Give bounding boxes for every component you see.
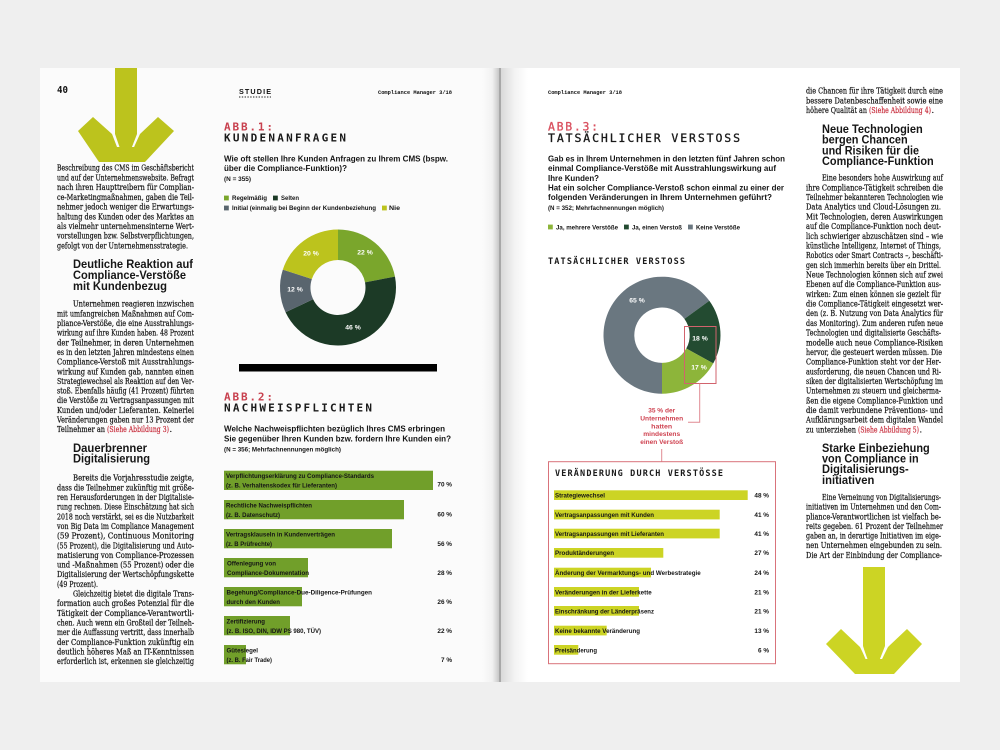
icon: bottom arrow xyxy=(826,567,922,674)
bar chart: (z. B. Datenschutz) xyxy=(226,512,280,519)
text block: Neue Technologien paragraph: ihre Compliance-Tätigkeit schreiben die xyxy=(806,182,943,192)
figure title: ABB.3: xyxy=(548,120,598,134)
text block: Digitalisierung paragraphs: der Compliance-Funktion zukünftig ein xyxy=(57,637,195,647)
text block: Neue Technologien paragraph: Eine besonders hohe Auswirkung auf xyxy=(822,173,944,183)
bar chart: (z. B Prüfrechte) xyxy=(226,541,272,548)
text block: Digitalisierung paragraphs: und -Maßnahmen (55 Prozent) oder die xyxy=(57,560,194,570)
figure title: NACHWEISPFLICHTEN xyxy=(224,402,372,415)
legend: Ja, mehrere Verstöße xyxy=(556,224,618,231)
text block: Neue Technologien paragraph: wirken: Zum einen können sie gezielt für xyxy=(806,289,941,299)
callout text: Unternehmen xyxy=(640,415,683,422)
callout: 35 % highlight box and leader xyxy=(662,326,716,462)
callout text: 35 % der xyxy=(648,407,676,414)
text block: Digitalisierung paragraphs: erforderlich ist, erkennen sie gleichzeitig xyxy=(57,656,195,666)
text block: Reaktion paragraph: stoß. Ebenfalls häufig (41 Prozent) führten xyxy=(57,386,194,396)
text block: Reaktion paragraph: pliance-Verstöße, die eine Ausstrahlungs- xyxy=(57,318,194,328)
bar chart xyxy=(224,471,452,664)
bar chart: Keine bekannte Veränderung xyxy=(555,628,640,635)
text block: Neue Technologien paragraph: (Siehe Abbildung 5) xyxy=(858,424,919,434)
figure title xyxy=(224,391,372,415)
divider bar xyxy=(239,364,437,372)
text block: left column intro: vorstellungen bzw. Selbstverpflichtungen, xyxy=(56,231,194,241)
text block: Starke Einbeziehung paragraph: initiativen im Unternehmen und den Com- xyxy=(806,502,941,512)
text block: left column intro: Beschreibung des CMS im Geschäftsbericht xyxy=(57,163,194,173)
text block: Neue Technologien paragraph: Neue Technologien können sich auf zwei xyxy=(806,270,943,280)
figure title xyxy=(224,121,346,144)
text block: Digitalisierung paragraphs: Digitalisierung der Wertschöpfungskette xyxy=(57,569,194,579)
question: Ihre Kunden? xyxy=(548,173,599,183)
question: Sie gegenüber Ihren Kunden bzw. fordern Ihre Kunden ein? xyxy=(224,434,451,444)
text block: right column intro: (Siehe Abbildung 4) xyxy=(869,105,931,115)
text block: Digitalisierung paragraphs: 2018 noch verstärkt, sei es die Nutzbarkeit xyxy=(57,511,194,521)
running head right: Compliance Manager 3/18 xyxy=(548,90,622,96)
text block: Digitalisierung paragraphs: rung rechnen. Diese Einschätzung hat sich xyxy=(57,502,194,512)
heading: Starke Einbeziehung: Starke Einbeziehung xyxy=(822,441,930,455)
text block: Digitalisierung paragraphs: (59 Prozent), Continuous Monitoring xyxy=(57,531,195,541)
bar chart: Strategiewechsel xyxy=(555,492,605,499)
text block: Reaktion paragraph: Veränderungen gaben nur 13 Prozent der xyxy=(56,414,194,424)
text block: right column intro: bessere Datenbeschaffenheit sowie eine xyxy=(806,95,943,105)
bar chart: Compliance-Dokumentation xyxy=(227,570,309,577)
page number: 40 xyxy=(57,85,68,96)
question: Hat ein solcher Compliance-Verstoß schon einmal zu einer der xyxy=(548,183,785,193)
text block: Neue Technologien paragraph: ßen die eigene Compliance-Funktion und xyxy=(806,395,944,405)
text block: Starke Einbeziehung paragraph xyxy=(806,492,943,560)
question: Wie oft stellen Ihre Kunden Anfragen zu Ihrem CMS (bspw. xyxy=(224,154,448,164)
text block: Neue Technologien paragraph: Data Analytics und Cloud-Lösungen zu. xyxy=(806,202,941,212)
text block: Neue Technologien paragraph: hervor, die gesteuert werden müssen. Die xyxy=(806,347,942,357)
question xyxy=(548,154,785,212)
text block: right column intro: . xyxy=(932,105,934,115)
bar chart: Rechtliche Nachweispflichten xyxy=(226,502,312,510)
text block: left column intro: ce-Marketingmaßnahmen, gaben die Teil- xyxy=(57,192,194,202)
bar chart: Produktänderungen xyxy=(555,550,614,557)
chart title: TATSÄCHLICHER VERSTOSS xyxy=(548,256,685,267)
text block: Digitalisierung paragraphs: (49 Prozent). xyxy=(57,579,98,589)
bar chart: Verpflichtungserklärung zu Compliance-Standards xyxy=(226,473,374,480)
bar chart: 7 % xyxy=(441,657,452,664)
text block: Neue Technologien paragraph: ausforderung, die neuen Chancen und Ri- xyxy=(806,366,941,376)
donut chart: 20 % xyxy=(303,250,319,258)
bar chart: 28 % xyxy=(437,570,452,577)
question: über die Compliance-Funktion)? xyxy=(224,163,347,173)
legend: Keine Verstöße xyxy=(696,224,740,231)
text block: Digitalisierung paragraphs: mer die Auffassung vertritt, dass innerhalb xyxy=(57,627,194,637)
text block: Starke Einbeziehung paragraph: Die Art der Einbindung der Compliance- xyxy=(806,550,942,560)
heading: Neue Technologien: bergen Chancen xyxy=(822,133,908,147)
text block: Neue Technologien paragraph: Robotics oder Smart Contracts –, beschäfti- xyxy=(806,250,943,260)
text block: Neue Technologien paragraph: den (z. B. Nutzung von Data Analytics für xyxy=(806,308,943,318)
text block: Neue Technologien paragraph: gen sich immerhin bereits über ein Drittel. xyxy=(806,260,941,270)
question: Gab es in Ihrem Unternehmen in den letzten fünf Jahren schon xyxy=(548,154,785,164)
text block: Digitalisierung paragraphs: chen. Auch wenn ein Großteil der Teilneh- xyxy=(57,618,194,628)
question: (N = 355) xyxy=(224,176,251,183)
question: Welche Nachweispflichten bezüglich Ihres CMS erbringen xyxy=(224,424,445,434)
callout text: hatten xyxy=(651,424,672,430)
text block: left column intro: und auf der Unternehmenswebsite. Befragt xyxy=(57,172,194,182)
text block: Reaktion paragraph: Strategiewechsel als Reaktion auf den Ver- xyxy=(57,376,194,386)
donut chart: 46 % xyxy=(345,324,361,332)
section tag: STUDIE: STUDIE xyxy=(239,87,271,96)
bar chart: Offenlegung von xyxy=(227,560,276,568)
text block: Reaktion paragraph: Unternehmen reagieren inzwischen xyxy=(73,299,195,309)
text block: Digitalisierung paragraphs: Bereits die Vorjahresstudie zeigte, xyxy=(73,473,194,483)
bar chart: 22 % xyxy=(437,628,452,635)
text block: left column intro: nach ihren Haupttreibern für Complian- xyxy=(57,182,194,192)
figure title xyxy=(548,120,740,145)
bar chart: Begehung/Compliance-Due-Diligence-Prüfungen xyxy=(226,590,372,596)
question: (N = 356; Mehrfachnennungen möglich) xyxy=(224,447,341,454)
text block: Reaktion paragraph: Kunden und/oder Lieferanten. Keinerlei xyxy=(57,405,194,415)
question: einmal Compliance-Verstöße mit Ausstrahlungswirkung auf xyxy=(548,163,776,173)
bar chart: 13 % xyxy=(754,628,769,635)
text block: Neue Technologien paragraph: künstliche Intelligenz, Internet of Things, xyxy=(806,240,941,250)
text block: Neue Technologien paragraph: Compliance-Funktion steht vor der Her- xyxy=(806,357,941,367)
bar chart: Vertragsanpassungen mit Kunden xyxy=(555,512,654,519)
heading: Deutliche Reaktion: mit Kundenbezug xyxy=(73,279,167,293)
text block: Starke Einbeziehung paragraph: nen Unternehmen eingebunden zu sein. xyxy=(806,540,942,550)
text block: left column intro: haltung des Kunden oder des Marktes an xyxy=(57,211,195,221)
donut chart xyxy=(604,277,720,394)
legend: Selten xyxy=(281,195,299,202)
text block: Reaktion paragraph: die Verstöße zu Vertragsanpassungen mit xyxy=(57,395,195,405)
donut chart: 12 % xyxy=(287,286,303,294)
text block: Neue Technologien paragraph: die damit verbundene Präventions- und xyxy=(806,405,944,415)
bar chart: 6 % xyxy=(758,647,769,654)
bar chart: 41 % xyxy=(754,512,769,519)
text block: Reaktion paragraph: Compliance-Verstoß mit Ausstrahlungs- xyxy=(57,357,194,367)
bar chart: 27 % xyxy=(754,550,769,557)
question xyxy=(224,424,451,454)
question: (N = 352; Mehrfachnennungen möglich) xyxy=(548,205,664,212)
bar chart: Gütesiegel xyxy=(226,648,258,654)
bar chart: (z. B. ISO, DIN, IDW PS 980, TÜV) xyxy=(226,626,321,635)
bar chart: 21 % xyxy=(754,608,769,615)
text block: Neue Technologien paragraph: auf die Compliance-Funktion noch deut- xyxy=(806,221,941,231)
text block: Starke Einbeziehung paragraph: reits gegeben. 61 Prozent der Teilnehmer xyxy=(806,521,943,531)
heading: Dauerbrenner xyxy=(73,441,150,466)
text block: Digitalisierung paragraphs: deutlich höheres Maß an IT-Kenntnissen xyxy=(57,646,195,656)
heading: Deutliche Reaktion: Compliance-Verstöße xyxy=(73,268,186,282)
bar chart: Zertifizierung xyxy=(226,618,265,626)
legend: Initial (einmalig bei Beginn der Kundenbeziehung xyxy=(232,205,376,212)
panel: Abb. 3 xyxy=(548,120,785,664)
figure title: ABB.2: xyxy=(224,391,273,404)
bar chart: 41 % xyxy=(754,531,769,538)
text block: Digitalisierung paragraphs: dass die Teilnehmer zukünftig mit größe- xyxy=(57,482,194,492)
text block: Neue Technologien paragraph: . xyxy=(920,424,922,434)
text block: left column intro xyxy=(56,163,195,250)
text block: Digitalisierung paragraphs: Gleichzeitig bietet die digitale Trans- xyxy=(73,588,194,598)
text block: Neue Technologien paragraph: lich schwieriger abzuschätzen sind – wie xyxy=(806,231,943,241)
bar chart: 60 % xyxy=(437,512,452,519)
legend: Ja, einen Verstoß xyxy=(632,224,682,231)
text block: left column intro: gefolgt von der Unternehmensstrategie. xyxy=(57,240,188,250)
text block: Neue Technologien paragraph: siken der digitalisierten Wertschöpfung im xyxy=(806,376,943,386)
bar chart: 24 % xyxy=(754,570,769,577)
text block: Digitalisierung paragraphs xyxy=(56,473,195,666)
text block: Reaktion paragraph: (Siehe Abbildung 3) xyxy=(107,424,169,434)
running head left: Compliance Manager 3/18 xyxy=(378,90,452,96)
text block: Starke Einbeziehung paragraph: Eine Verneinung von Digitalisierungs- xyxy=(822,492,941,502)
text block: Starke Einbeziehung paragraph: pliance-Verantwortlichen ist vielfach be- xyxy=(806,511,941,521)
text block: Neue Technologien paragraph: Teilnehmer bekannteren Technologien wie xyxy=(806,192,943,202)
text block: Neue Technologien paragraph: zu unterziehen xyxy=(806,424,857,434)
text block: Neue Technologien paragraph: Aufklärungsarbeit dem digitalen Wandel xyxy=(805,415,943,425)
legend xyxy=(548,224,740,231)
text block: Reaktion paragraph: . xyxy=(170,424,172,434)
bar chart: Preisänderung xyxy=(555,647,597,654)
right page xyxy=(499,68,960,682)
question xyxy=(224,154,448,183)
text block: Reaktion paragraph: wirkung auf Kunden gab, nannten einen xyxy=(57,366,195,376)
text block: Digitalisierung paragraphs: matisierung von Compliance-Prozessen xyxy=(57,550,195,560)
text block: Neue Technologien paragraph xyxy=(805,173,944,434)
bar chart: 70 % xyxy=(437,482,452,489)
heading: Neue Technologien: und Risiken für die xyxy=(822,143,919,157)
donut chart: 17 % xyxy=(691,364,707,371)
bar chart: Änderung der Vermarktungs- und Werbestrategie xyxy=(555,569,701,577)
text block: Digitalisierung paragraphs: formation auch großes Potenzial für die xyxy=(57,598,194,608)
bar chart: 21 % xyxy=(754,589,769,596)
callout text: mindestens xyxy=(643,431,680,438)
text block: Neue Technologien paragraph: Ebenen auf die Compliance-Funktion aus- xyxy=(806,279,941,289)
text block: Neue Technologien paragraph: Unternehmen zu steuern und gleicherma- xyxy=(806,386,941,396)
text block: left column intro: als vielmehr unternehmensinterne Wert- xyxy=(57,221,194,231)
question: folgenden Veränderungen in Ihrem Unternehmen geführt? xyxy=(548,192,772,202)
donut chart xyxy=(280,230,396,346)
bar chart: (z. B. Fair Trade) xyxy=(226,657,272,664)
heading: Neue Technologien xyxy=(822,122,934,168)
text block: Reaktion paragraph: es in den letzten Jahren mindestens einen xyxy=(57,347,194,357)
figure title: KUNDENANFRAGEN xyxy=(224,132,346,144)
figure title: TATSÄCHLICHER VERSTOSS xyxy=(548,130,740,145)
legend: Nie xyxy=(389,205,400,212)
text block: Neue Technologien paragraph: Technologien und digitalisierte Geschäfts- xyxy=(806,328,941,338)
text block: right column intro: höhere Qualität an xyxy=(806,105,867,115)
heading: Starke Einbeziehung: Digitalisierungs- xyxy=(822,462,909,476)
text block: Neue Technologien paragraph: das Monitoring). Zum anderen rufen neue xyxy=(806,318,943,328)
bar chart: Einschränkung der Länderpräsenz xyxy=(555,608,654,615)
bar chart: 48 % xyxy=(754,492,769,499)
text block: Reaktion paragraph xyxy=(56,299,195,434)
heading: Deutliche Reaktion: Deutliche Reaktion auf xyxy=(73,257,193,271)
heading: Dauerbrenner: Dauerbrenner xyxy=(73,441,147,455)
text block: Reaktion paragraph: wirkung auf ihre Kunden haben. 48 Prozent xyxy=(57,328,194,338)
panel: Abb. 2 xyxy=(224,391,452,664)
text block: Digitalisierung paragraphs: (55 Prozent), die Digitalisierung und Auto- xyxy=(57,540,194,550)
donut chart: 18 % xyxy=(692,335,708,342)
text block: right column intro xyxy=(806,86,943,115)
text block: Reaktion paragraph: der Teilnehmer, in deren Unternehmen xyxy=(57,337,195,347)
bar chart: Vertragsklauseln in Kundenverträgen xyxy=(226,532,335,538)
callout text xyxy=(640,407,683,446)
text block: Digitalisierung paragraphs: von Big Data im Compliance Management xyxy=(56,521,195,531)
bar chart: 26 % xyxy=(437,599,452,606)
panel: Veränderung durch Verstöße xyxy=(548,462,776,664)
bar chart xyxy=(554,490,769,655)
text block: Digitalisierung paragraphs: Tätigkeit der Compliance-Verantwortli- xyxy=(57,608,194,618)
text block: Reaktion paragraph: mit umfangreichen Maßnahmen auf Com- xyxy=(57,308,194,318)
heading: Starke Einbeziehung xyxy=(822,441,930,487)
text block: Neue Technologien paragraph: die Compliance-Tätigkeit eingesetzt wer- xyxy=(806,298,943,308)
heading: Deutliche Reaktion xyxy=(73,257,193,293)
bar chart: Veränderungen in der Lieferkette xyxy=(555,589,652,596)
text block: Neue Technologien paragraph: Mit Technologien, deren Auswirkungen xyxy=(806,211,944,221)
legend: Regelmäßig xyxy=(232,195,267,202)
left page xyxy=(40,68,499,682)
donut chart: 22 % xyxy=(357,250,373,256)
heading: Starke Einbeziehung: von Compliance in xyxy=(822,452,919,466)
figure title: ABB.1: xyxy=(224,121,273,134)
heading: Dauerbrenner: Digitalisierung xyxy=(73,452,150,466)
text block: Starke Einbeziehung paragraph: gaben an, in derartige Initiativen im eige- xyxy=(806,530,941,540)
heading: Starke Einbeziehung: initiativen xyxy=(822,473,874,487)
donut chart: 65 % xyxy=(629,297,645,304)
bar chart: Vertragsanpassungen mit Lieferanten xyxy=(555,531,664,538)
text block: left column intro: nehmer jedoch weniger die Erwartungs- xyxy=(57,202,194,212)
heading: Neue Technologien: Compliance-Funktion xyxy=(822,154,934,168)
legend xyxy=(224,195,400,212)
text block: Neue Technologien paragraph: modelle auch neue Compliance-Risiken xyxy=(806,337,944,347)
bar chart: (z. B. Verhaltenskodex für Lieferanten) xyxy=(226,482,337,490)
panel: Abb. 1 xyxy=(224,121,448,346)
text block: right column intro: die Chancen für ihre Tätigkeit durch eine xyxy=(806,86,943,96)
callout text: einen Verstoß xyxy=(640,439,683,446)
text block: Reaktion paragraph: Teilnehmer an xyxy=(57,424,106,434)
icon: top arrow xyxy=(78,68,174,162)
bar chart: durch den Kunden xyxy=(226,599,280,606)
panel heading: VERÄNDERUNG DURCH VERSTÖSSE xyxy=(555,468,723,479)
text block: Digitalisierung paragraphs: ren Herausforderungen in der Digitalisie- xyxy=(57,492,194,502)
bar chart: 56 % xyxy=(437,541,452,548)
heading: Neue Technologien: Neue Technologien xyxy=(822,122,923,136)
